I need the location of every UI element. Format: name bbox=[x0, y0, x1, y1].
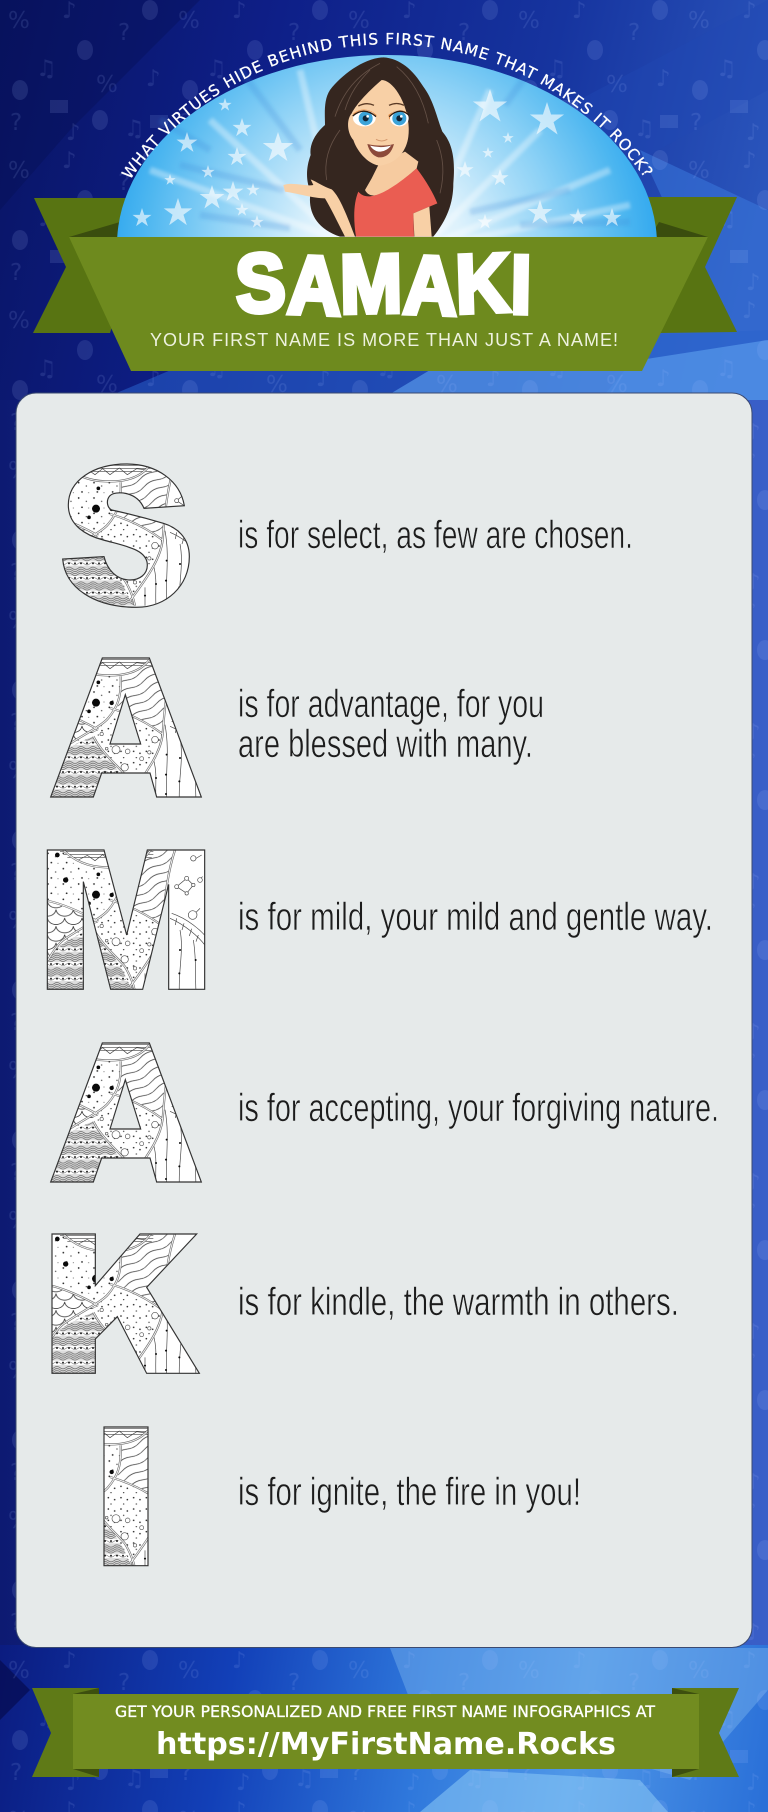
text: A line: is for advantage, for you bbox=[238, 683, 544, 726]
main ribbon bbox=[69, 237, 708, 371]
letter S bbox=[62, 463, 190, 608]
letter I bbox=[103, 1426, 149, 1566]
letter K bbox=[51, 1233, 200, 1374]
footer ribbon bbox=[32, 1688, 739, 1777]
letter A bbox=[43, 656, 210, 800]
sunburst dome with stars bbox=[117, 55, 657, 237]
header ribbon tails bbox=[33, 197, 737, 333]
footer call to action: GET YOUR PERSONALIZED AND FREE FIRST NAME INFOGRAPHICS AT bbox=[115, 1702, 655, 1721]
letter A second bbox=[43, 1041, 210, 1185]
footer url: https://MyFirstName.Rocks bbox=[156, 1727, 616, 1762]
text: I line: is for ignite, the fire in you! bbox=[238, 1471, 581, 1514]
text: A line bbox=[238, 683, 544, 766]
panel: acrostic bbox=[16, 393, 752, 1648]
subtitle: YOUR FIRST NAME IS MORE THAN JUST A NAME! bbox=[150, 330, 618, 350]
text: S line: is for select, as few are chosen. bbox=[238, 514, 633, 557]
letter M bbox=[43, 848, 210, 992]
name title: SAMAKI bbox=[233, 236, 532, 333]
character illustration bbox=[283, 57, 454, 237]
text: A line: are blessed with many. bbox=[238, 723, 533, 766]
arched heading: WHAT VIRTUES HIDE BEHIND THIS FIRST NAME THAT MAKES IT ROCK? bbox=[120, 32, 652, 178]
